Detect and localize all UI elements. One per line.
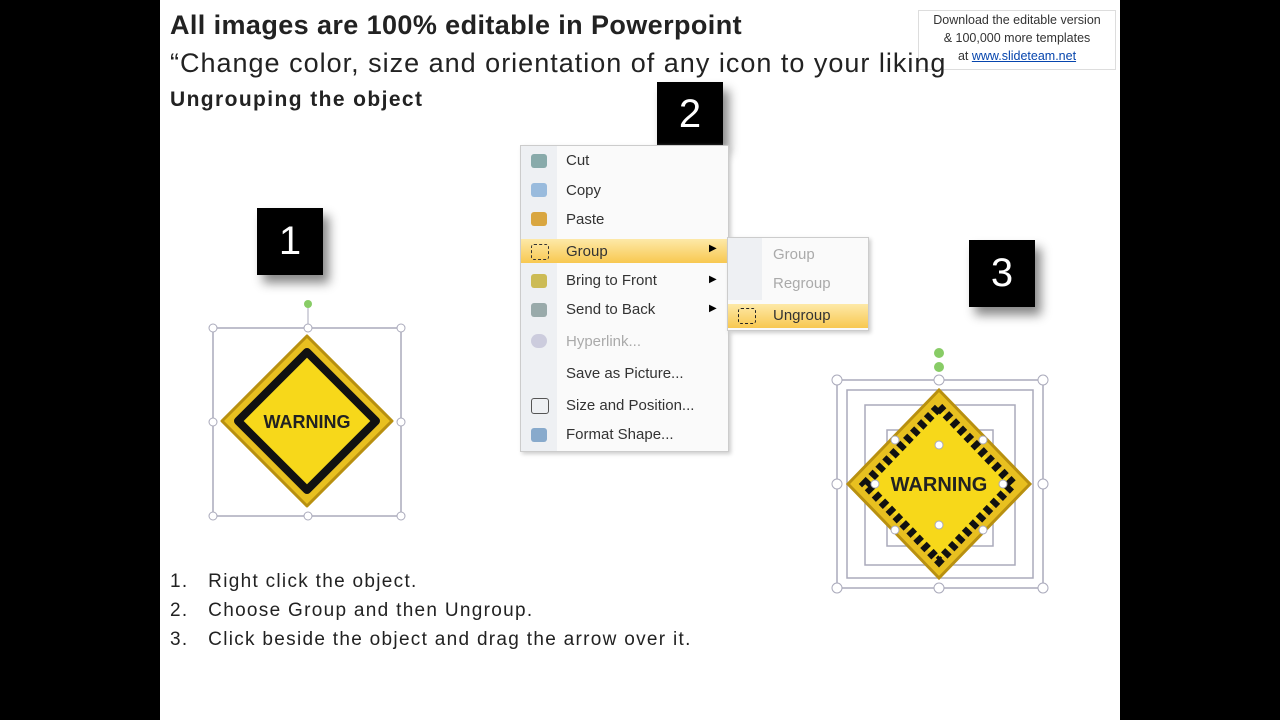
submenu: Ungroup [773,307,831,324]
context menu: Format Shape... [566,426,674,443]
number badge 1 [257,208,323,275]
number badge 2 [657,82,723,146]
warning sign 1 with selection box [208,300,406,520]
instructions list: 1. Right click the object. [170,571,418,592]
context menu: Size and Position... [566,397,694,414]
number badge 3 [969,240,1035,307]
number badge 2: 2 [679,92,701,136]
submenu: Regroup [773,275,831,292]
context menu: ▶ [709,303,717,314]
context menu: Copy [566,182,601,199]
context menu: Hyperlink... [566,333,641,350]
submenu: Group [773,246,815,263]
context menu: ▶ [709,274,717,285]
instructions list: 2. Choose Group and then Ungroup. [170,600,533,621]
submenu [727,237,869,331]
number badge 3: 3 [991,251,1013,295]
instructions list [170,571,692,650]
warning sign 1 with selection box: WARNING [264,412,350,432]
subtitle: “Change color, size and orientation of any icon to your liking [170,48,946,78]
heading: Ungrouping the object [170,88,423,111]
context menu: Paste [566,211,604,228]
context menu: ▶ [709,243,717,254]
instructions list: 3. Click beside the object and drag the arrow over it. [170,629,692,650]
context menu: Cut [566,152,589,169]
title: All images are 100% editable in Powerpoint [170,10,742,40]
download note [918,10,1116,70]
context menu: Send to Back [566,301,655,318]
download note: Download the editable version [933,13,1101,27]
slide [160,0,1120,720]
warning sign 3 ungrouped: WARNING [891,474,987,496]
warning sign 3 ungrouped [832,348,1048,594]
number badge 1: 1 [279,219,301,263]
context menu [520,145,729,452]
context menu: Bring to Front [566,272,657,289]
context menu: Save as Picture... [566,365,684,382]
download note: & 100,000 more templates [944,31,1090,45]
download note: at www.slideteam.net [958,49,1076,63]
context menu: Group [566,243,608,260]
